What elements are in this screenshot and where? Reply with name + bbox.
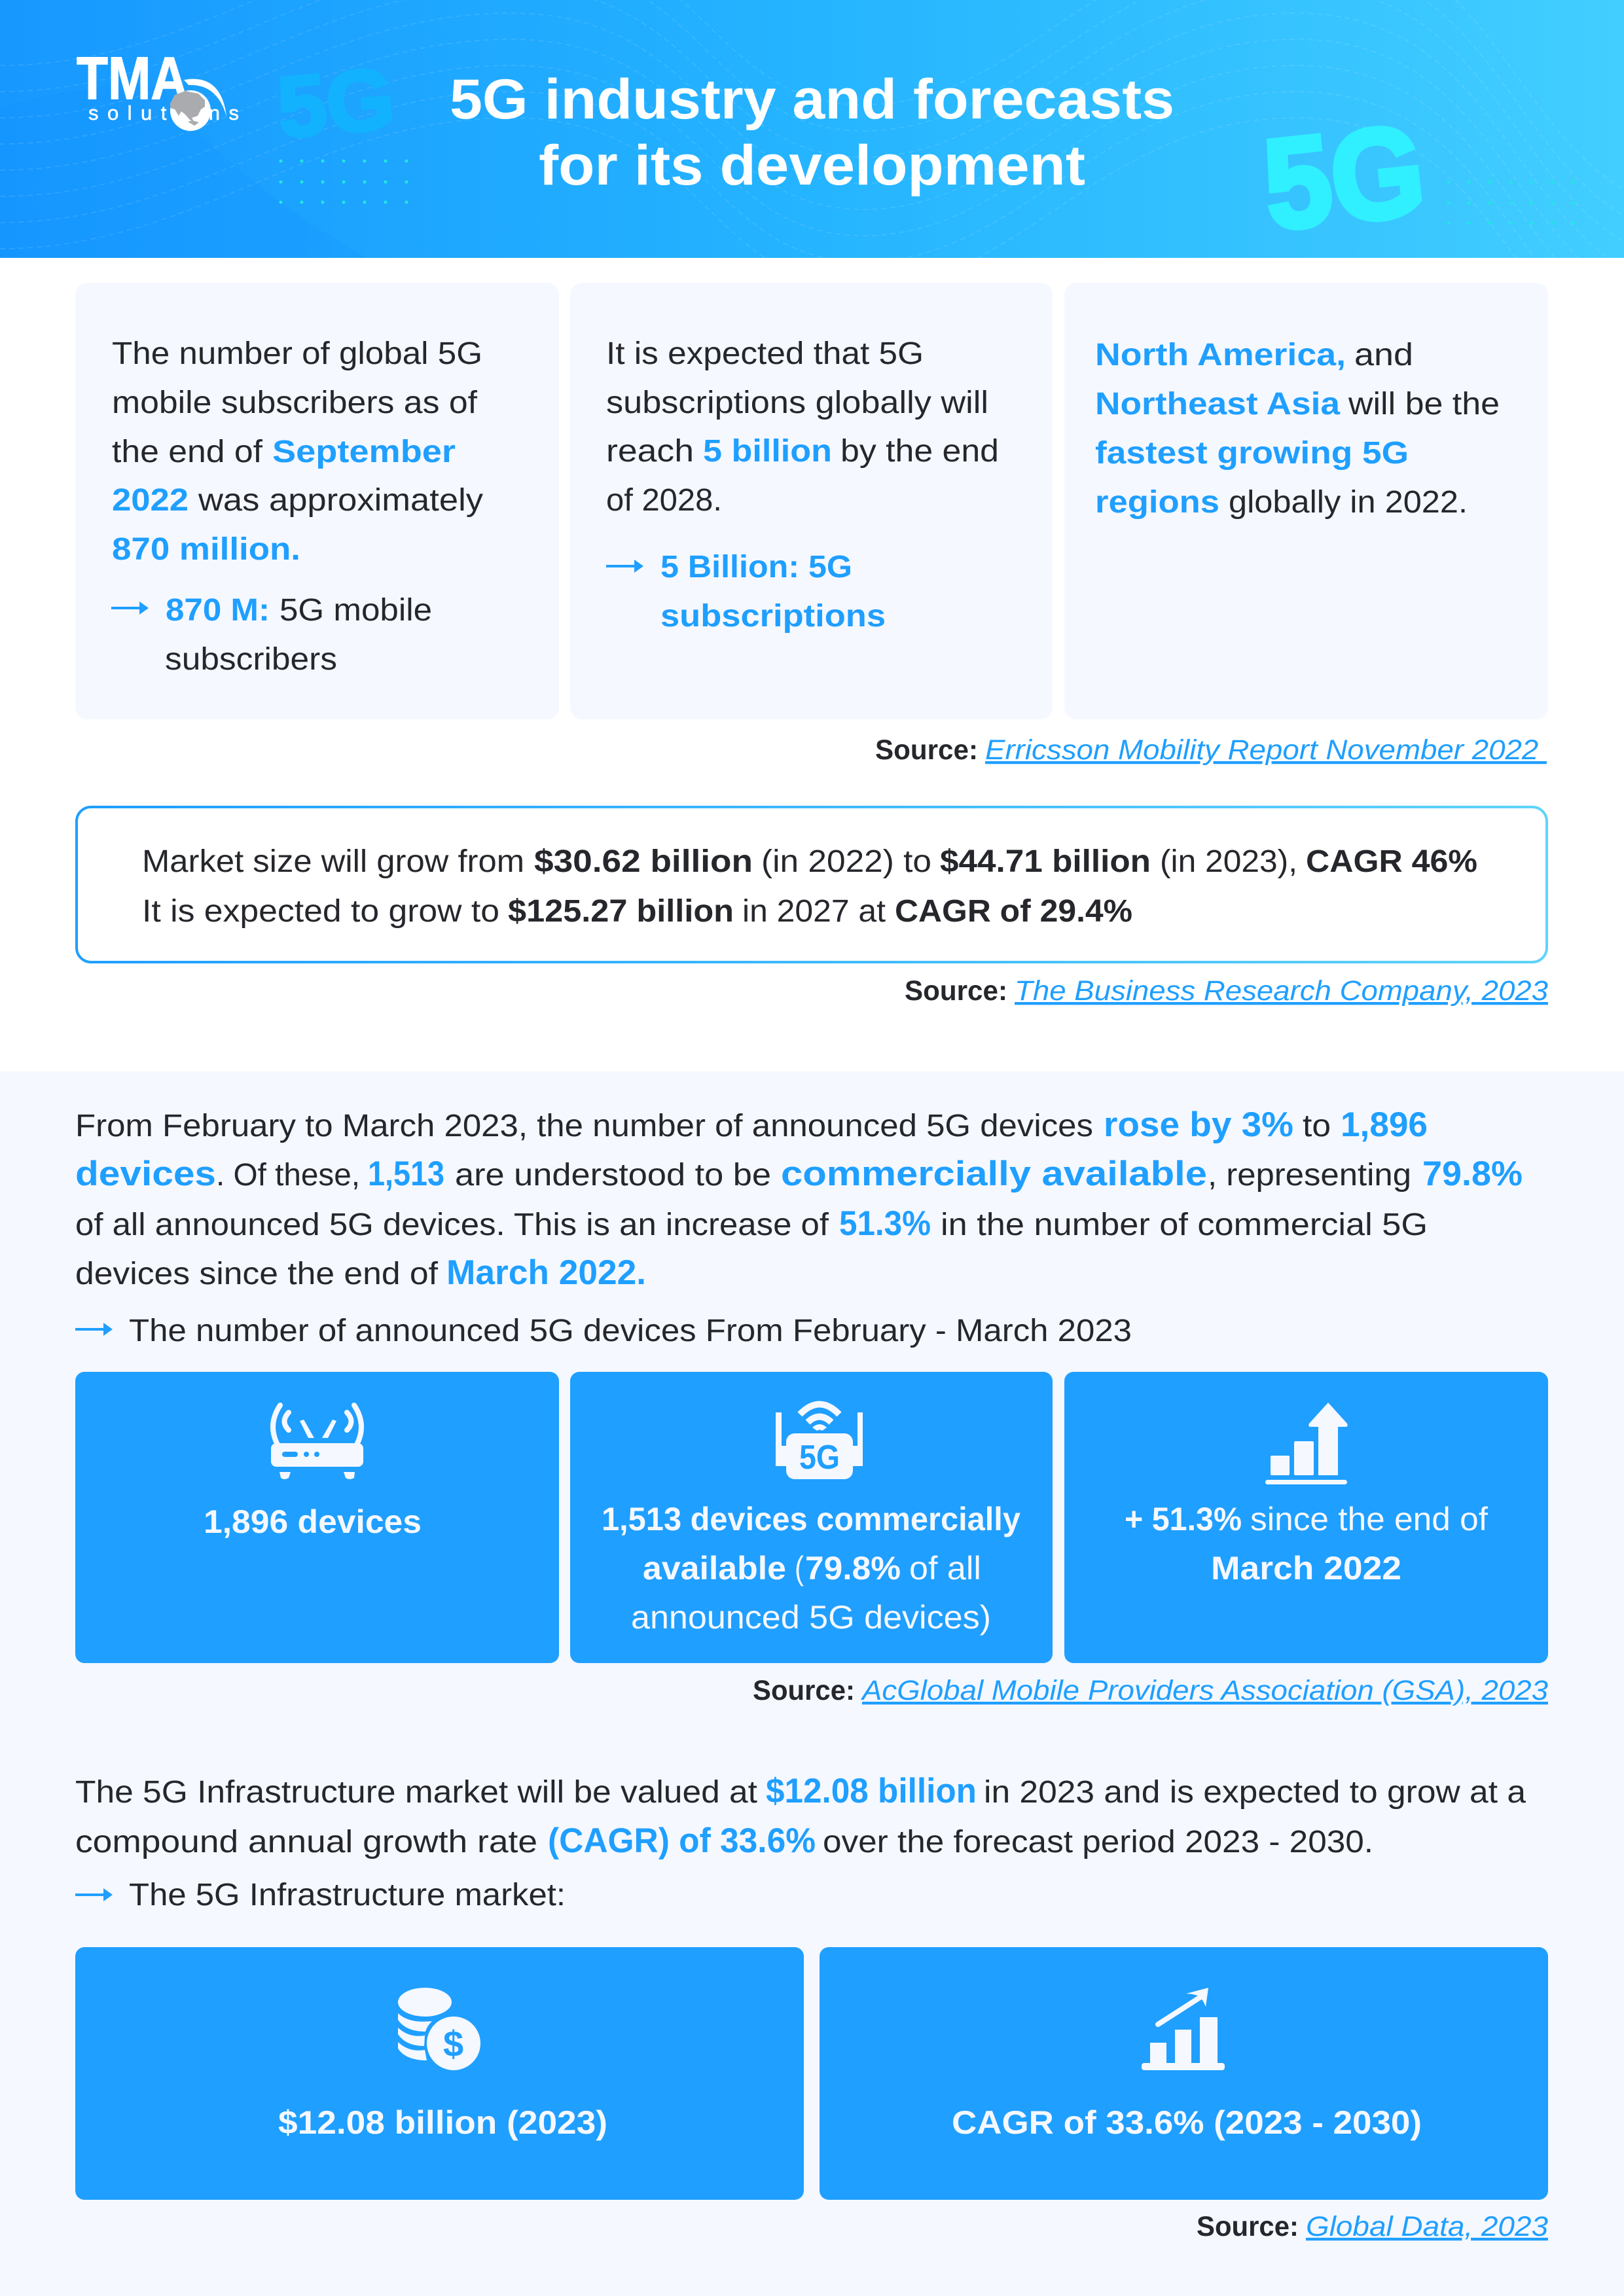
text: 5 billion callout: 5 Billion: 5G: [660, 550, 852, 584]
text: commercial devices: 79.8%: [805, 1550, 901, 1587]
panel: global subscribers: [75, 283, 559, 719]
text: commercial devices: available: [643, 1550, 786, 1587]
callout: market size: [77, 807, 1547, 962]
arrow: [75, 1323, 113, 1336]
text: commercial devices: 1,513 devices commercially: [602, 1501, 1020, 1537]
icon: coins: [398, 1988, 480, 2070]
text: regions paragraph: regions: [1095, 485, 1219, 520]
text: forecast paragraph: of 2028.: [606, 483, 722, 518]
text: $12.08 billion: $12.08 billion (2023): [278, 2104, 607, 2141]
decorative 5G small: 5G: [274, 50, 398, 156]
text: subscribers paragraph: 870 million.: [112, 532, 300, 567]
icon: 5G router: [776, 1405, 863, 1479]
text: announced devices paragraph: of all announced 5G devices. This is an increase of: [75, 1208, 829, 1242]
text: growth: [1125, 1501, 1488, 1587]
source: GSA: AcGlobal Mobile Providers Association (GSA), 2023: [860, 1675, 1548, 1706]
callout: market size: Market size will grow from: [142, 844, 524, 879]
callout: market size: $125.27 billion: [508, 894, 734, 929]
title: for its development: [539, 134, 1085, 197]
icon: 5G router: 5G: [799, 1439, 840, 1477]
callout: market size: CAGR 46%: [1306, 844, 1477, 879]
text: 870 M callout: 5G mobile: [280, 593, 432, 628]
icon: coins: $: [443, 2023, 463, 2064]
text: infrastructure paragraph: compound annual growth rate: [75, 1825, 537, 1859]
text: forecast paragraph: by the end: [840, 434, 999, 469]
text: regions paragraph: Northeast Asia: [1095, 387, 1340, 422]
title: [450, 68, 1174, 197]
panel: 51.3% growth: [1064, 1372, 1548, 1663]
panel: CAGR: [820, 1947, 1548, 2200]
source: Business Research Company: The Business Research Company, 2023: [1015, 975, 1548, 1007]
arrow: [606, 560, 643, 573]
text: announced devices paragraph: devices since the end of: [75, 1257, 439, 1291]
text: subscribers paragraph: 2022: [112, 483, 189, 518]
callout: market size: in 2027 at: [742, 894, 886, 929]
source: GSA: Source:: [753, 1675, 855, 1706]
text: infrastructure subheading: The 5G Infrastructure market:: [129, 1878, 566, 1912]
arrow: [75, 1888, 113, 1901]
callout: market size: $30.62 billion: [534, 844, 753, 879]
text: growth: + 51.3%: [1125, 1501, 1242, 1537]
text: infrastructure paragraph: in 2023 and is expected to grow at a: [984, 1775, 1526, 1810]
decorative 5G large: 5G: [1257, 98, 1431, 257]
text: announced devices paragraph: 1,513: [368, 1155, 444, 1193]
text: subscribers paragraph: September: [272, 435, 456, 469]
text: announced devices paragraph: [75, 1105, 1523, 1292]
text: announced devices paragraph: . Of these,: [216, 1158, 360, 1193]
text: forecast paragraph: [606, 336, 999, 518]
text: CAGR: CAGR of 33.6% (2023 - 2030): [952, 2104, 1422, 2141]
source: Ericsson: Erricsson Mobility Report November 2022: [985, 734, 1547, 766]
arrow: [111, 601, 149, 615]
text: devices subheading: The number of announced 5G devices From February - March 2023: [129, 1314, 1132, 1348]
source: Business Research Company: Source:: [905, 975, 1007, 1007]
text: forecast paragraph: It is expected that 5G: [606, 336, 924, 371]
logo: TMA solutions: solutions: [88, 101, 239, 124]
text: regions paragraph: North America,: [1095, 338, 1346, 372]
logo: TMA solutions: TMA: [77, 45, 188, 112]
text: announced devices paragraph: , representing: [1208, 1158, 1411, 1193]
icon: rising bars with arrow: [1265, 1403, 1348, 1484]
panel: 1,513 commercial devices: [570, 1372, 1053, 1663]
text: 870 M callout: 870 M:: [166, 593, 270, 628]
logo: TMA solutions: [77, 45, 239, 131]
text: regions paragraph: [1095, 338, 1500, 520]
callout: market size: CAGR of 29.4%: [895, 894, 1132, 929]
text: 5 billion callout: subscriptions: [660, 599, 886, 634]
text: announced devices paragraph: commercially available: [781, 1155, 1207, 1193]
text: growth: since the end of: [1250, 1501, 1488, 1537]
text: 5 billion callout: [660, 550, 886, 634]
text: infrastructure paragraph: $12.08 billion: [766, 1772, 977, 1810]
text: subscribers paragraph: was approximately: [198, 483, 483, 518]
text: announced devices paragraph: rose by 3%: [1104, 1105, 1293, 1144]
icon: growth chart with arrow: [1142, 1988, 1225, 2070]
text: announced devices paragraph: 51.3%: [839, 1204, 931, 1243]
panel: fastest growing regions: [1064, 283, 1548, 719]
text: regions paragraph: fastest growing 5G: [1095, 436, 1409, 471]
panel: market value: [75, 1947, 804, 2200]
text: announced devices paragraph: in the number of commercial 5G: [941, 1208, 1428, 1242]
text: infrastructure paragraph: The 5G Infrastructure market will be valued at: [75, 1775, 757, 1810]
text: announced devices paragraph: From February to March 2023, the number of announced 5G devices: [75, 1109, 1093, 1143]
text: subscribers paragraph: mobile subscribers as of: [112, 386, 478, 420]
header banner: [0, 0, 1624, 380]
text: 1,896 devices: 1,896 devices: [204, 1503, 422, 1540]
title: 5G industry and forecasts: [450, 68, 1174, 131]
source: Global Data: Global Data, 2023: [1306, 2211, 1548, 2242]
source: Global Data: [1197, 2211, 1548, 2242]
callout: market size: It is expected to grow to: [142, 894, 499, 929]
text: infrastructure paragraph: (CAGR) of 33.6%: [548, 1821, 816, 1860]
text: commercial devices: of all: [909, 1550, 981, 1587]
icon: router: [271, 1405, 363, 1479]
text: forecast paragraph: subscriptions globally will: [606, 386, 988, 420]
text: commercial devices: announced 5G devices): [631, 1599, 991, 1636]
text: commercial devices: (: [795, 1550, 804, 1587]
text: announced devices paragraph: 79.8%: [1422, 1155, 1523, 1193]
text: growth: March 2022: [1211, 1550, 1401, 1587]
decorative dots: [279, 160, 1575, 225]
panel: 5 billion forecast: [570, 283, 1053, 719]
panel: 1,896 devices: [75, 1372, 559, 1663]
text: regions paragraph: globally in 2022.: [1229, 485, 1468, 520]
text: subscribers paragraph: the end of: [112, 435, 263, 469]
text: announced devices paragraph: to: [1303, 1109, 1331, 1143]
callout: market size: $44.71 billion: [940, 844, 1151, 879]
callout: market size: (in 2022) to: [761, 844, 931, 879]
text: infrastructure paragraph: [75, 1772, 1526, 1860]
text: forecast paragraph: 5 billion: [703, 434, 832, 469]
text: regions paragraph: and: [1354, 338, 1413, 372]
source: Ericsson: Source:: [875, 734, 978, 766]
text: subscribers paragraph: The number of global 5G: [112, 336, 482, 371]
text: 870 M callout: subscribers: [165, 642, 337, 677]
source: Global Data: Source:: [1197, 2211, 1299, 2242]
text: regions paragraph: will be the: [1348, 387, 1500, 422]
text: 870 M callout: [165, 593, 432, 677]
text: infrastructure paragraph: over the forecast period 2023 - 2030.: [823, 1825, 1373, 1859]
text: forecast paragraph: reach: [606, 434, 694, 469]
text: subscribers paragraph: [112, 336, 483, 567]
text: announced devices paragraph: devices: [75, 1155, 216, 1193]
text: announced devices paragraph: 1,896: [1341, 1105, 1428, 1144]
callout: market size: (in 2023),: [1160, 844, 1297, 879]
text: announced devices paragraph: are understood to be: [455, 1158, 771, 1193]
text: commercial devices: [602, 1501, 1020, 1636]
text: announced devices paragraph: March 2022.: [446, 1253, 646, 1292]
